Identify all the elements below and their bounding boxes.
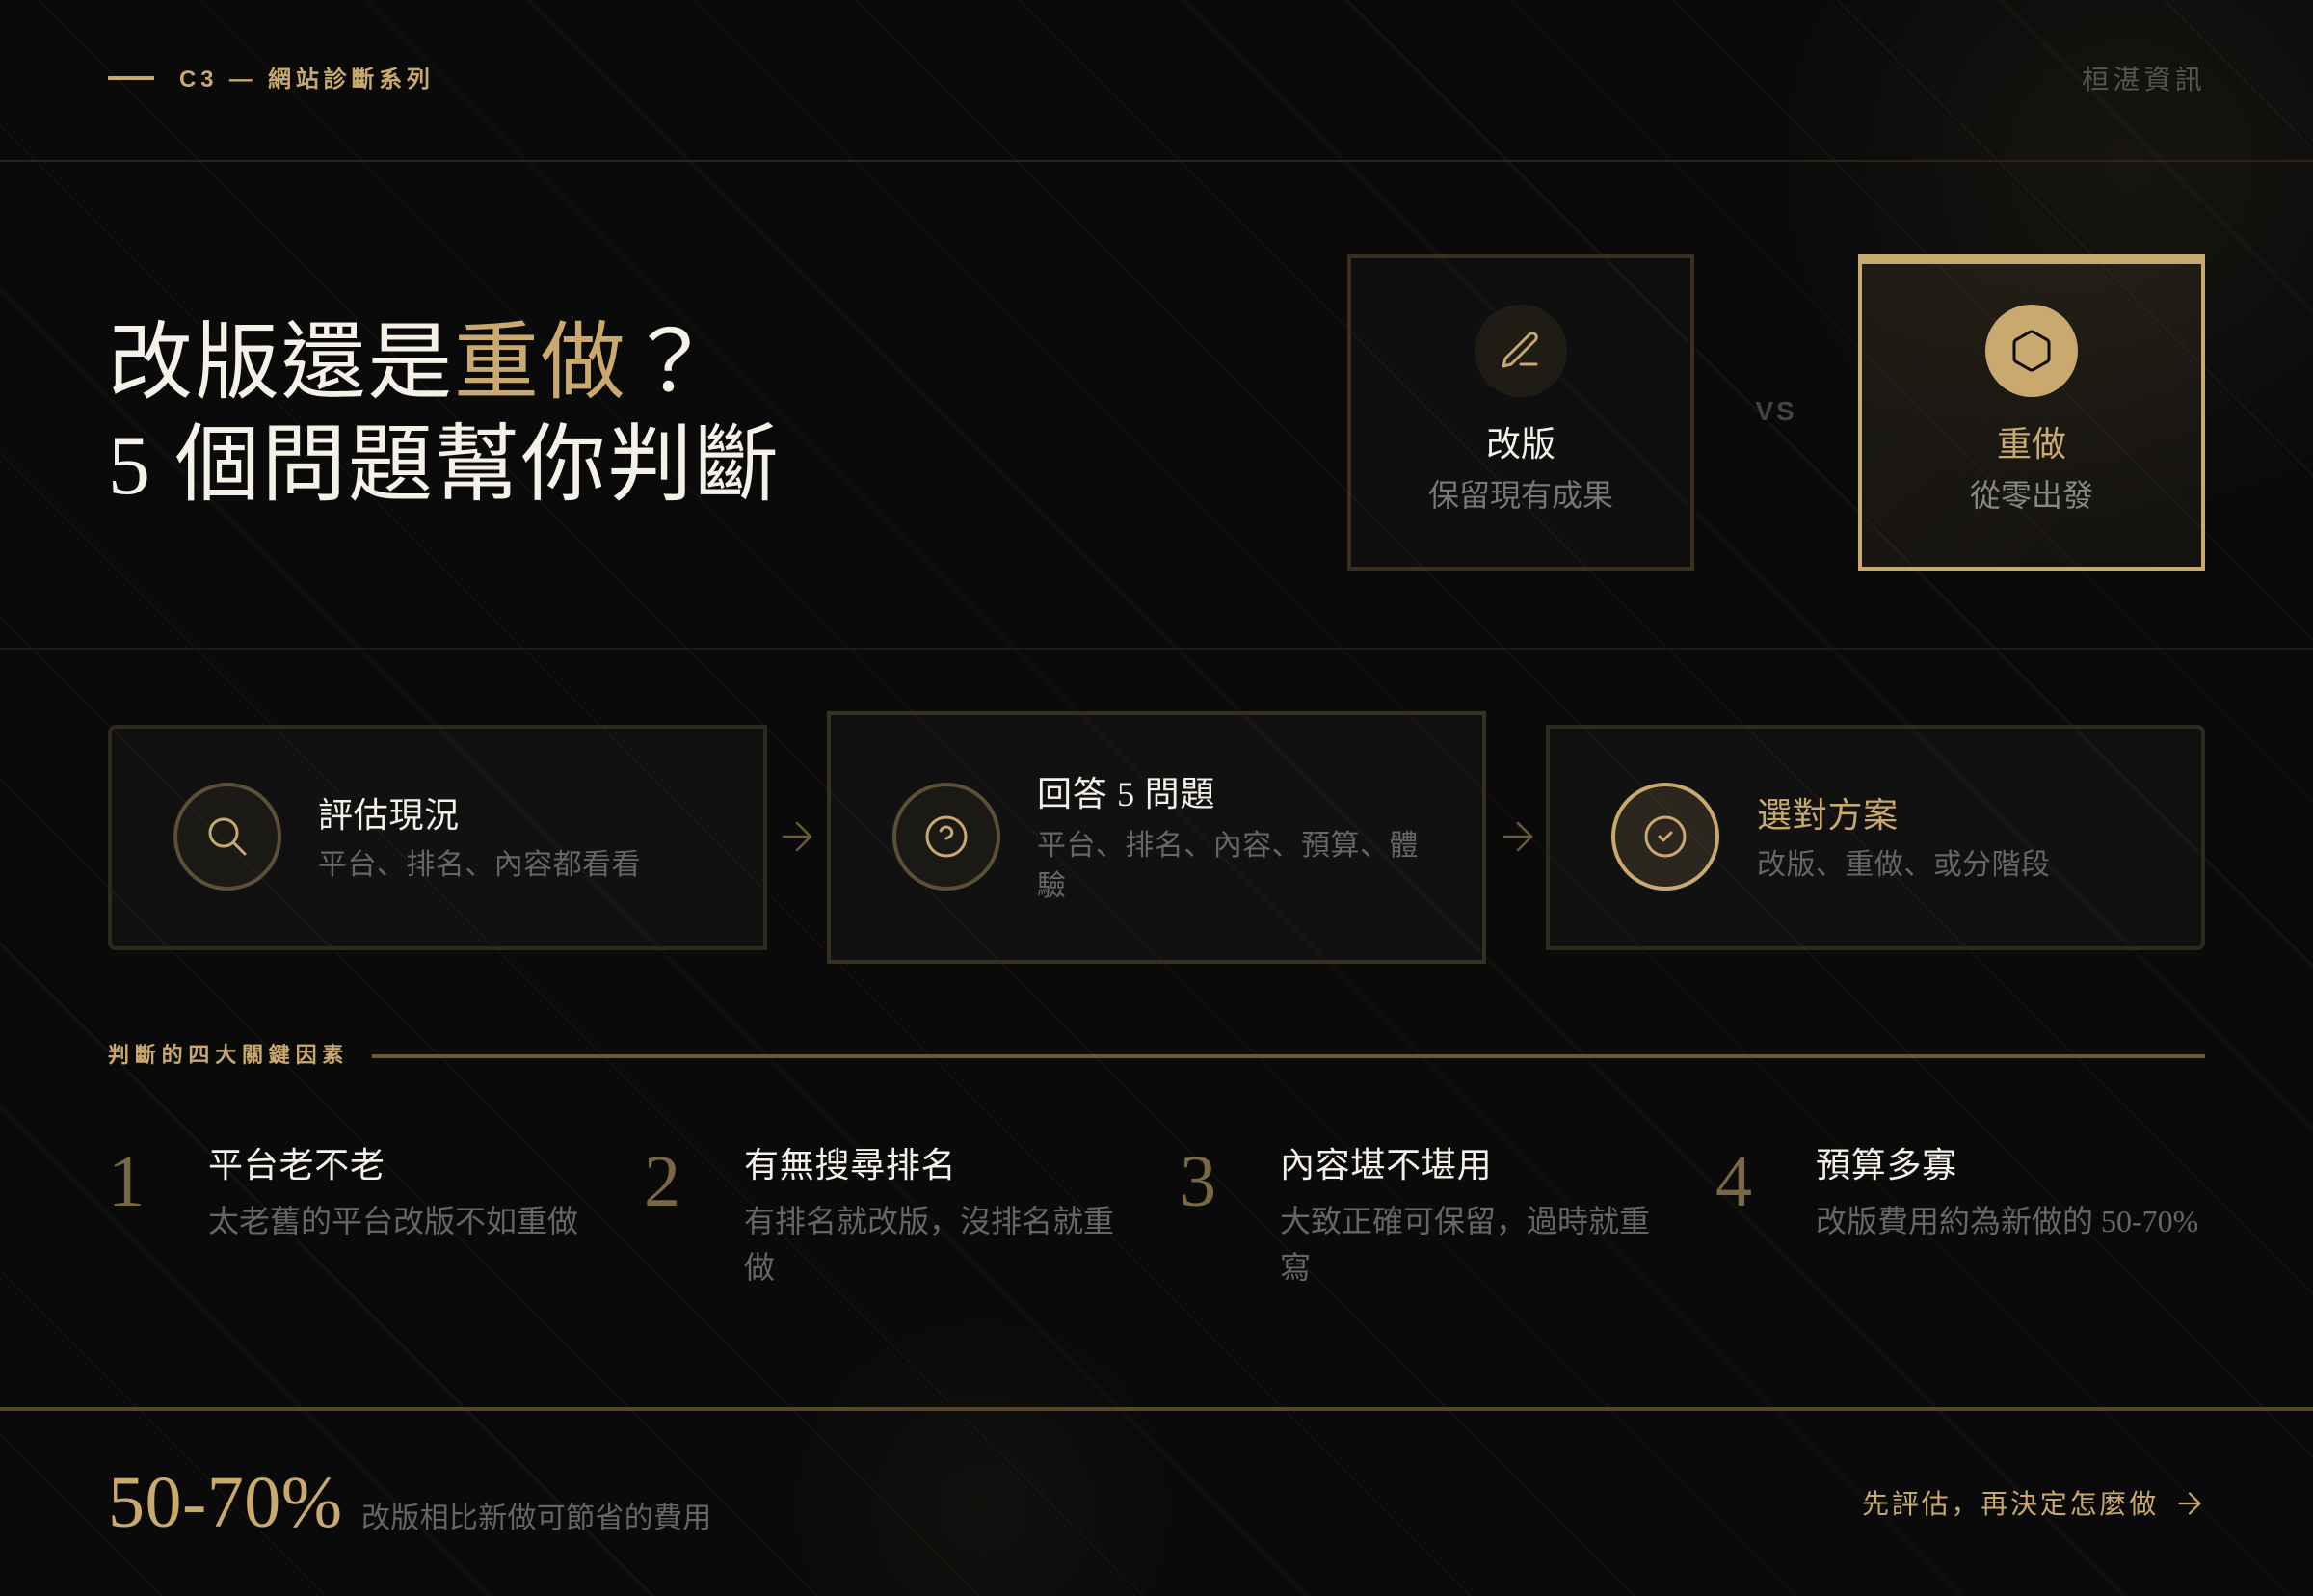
factor 3 [1180, 1141, 1650, 1285]
step 2 icon: question [892, 783, 1000, 891]
vs label: VS [1756, 396, 1796, 426]
heading rule [372, 1054, 2205, 1058]
step 3: 選對方案 [1546, 725, 2205, 950]
factor description: 改版費用約為新做的 50-70% [1816, 1204, 2198, 1238]
factor 4 [1715, 1141, 2198, 1238]
factor title: 有無搜尋排名 [744, 1146, 956, 1184]
factor number: 1 [108, 1141, 145, 1222]
factor title: 平台老不老 [208, 1146, 386, 1184]
step 3 icon: check [1611, 783, 1719, 891]
step 1 title: 評估現況 [318, 796, 460, 835]
arrow: step 1 to 2 [783, 821, 811, 852]
factor number: 3 [1180, 1141, 1216, 1222]
header bar [0, 0, 2313, 162]
step 2 title: 回答 5 問題 [1037, 775, 1215, 813]
factor description: 太老舊的平台改版不如重做 [208, 1204, 578, 1238]
option card: 改版 [1347, 254, 1694, 571]
card top accent bar [1862, 258, 2201, 264]
series label: C3 — 網站診斷系列 [179, 66, 435, 93]
step 3 title: 選對方案 [1757, 796, 1899, 835]
footer bar [0, 1407, 2313, 1596]
section heading [108, 1043, 2205, 1067]
header accent rule [108, 76, 154, 80]
step 1 description: 平台、排名、內容都看看 [318, 849, 641, 881]
brand name: 桓湛資訊 [2082, 65, 2206, 94]
factor description: 大致正確可保留，過時就重寫 [1280, 1204, 1650, 1285]
footer statistic: 50-70% [108, 1462, 343, 1543]
option card: 重做 [1858, 254, 2205, 571]
factor number: 2 [644, 1141, 680, 1222]
factor 1 [108, 1141, 578, 1238]
factor number: 4 [1715, 1141, 1752, 1222]
option label: 改版 [1486, 425, 1555, 464]
icon: pen [1475, 305, 1567, 397]
footer call to action: 先評估，再決定怎麼做 [1862, 1489, 2159, 1519]
hero title: 改版還是重做？ [108, 317, 713, 411]
step 3 description: 改版、重做、或分階段 [1757, 849, 2051, 881]
option description: 保留現有成果 [1428, 478, 1613, 513]
factor description: 有排名就改版，沒排名就重做 [744, 1204, 1114, 1285]
step 2: 回答 5 問題 [827, 711, 1486, 964]
hero section [0, 162, 2313, 650]
step 2 description: 平台、排名、內容、預算、體驗 [1037, 830, 1419, 902]
arrow: step 2 to 3 [1503, 821, 1532, 852]
footer arrow [2178, 1492, 2201, 1515]
option description: 從零出發 [1970, 478, 2093, 513]
hero title: 5 個問題幫你判斷 [108, 419, 781, 513]
icon: hexagon [1985, 305, 2078, 397]
step 1: 評估現況 [108, 725, 767, 950]
step 1 icon: search [173, 783, 281, 891]
hero title [108, 317, 781, 513]
factor title: 預算多寡 [1816, 1146, 1957, 1184]
footer statistic caption: 改版相比新做可節省的費用 [361, 1503, 712, 1534]
factor title: 內容堪不堪用 [1280, 1146, 1492, 1184]
heading label: 判斷的四大關鍵因素 [108, 1043, 349, 1067]
factor 2 [644, 1141, 1114, 1285]
option label: 重做 [1997, 425, 2066, 464]
